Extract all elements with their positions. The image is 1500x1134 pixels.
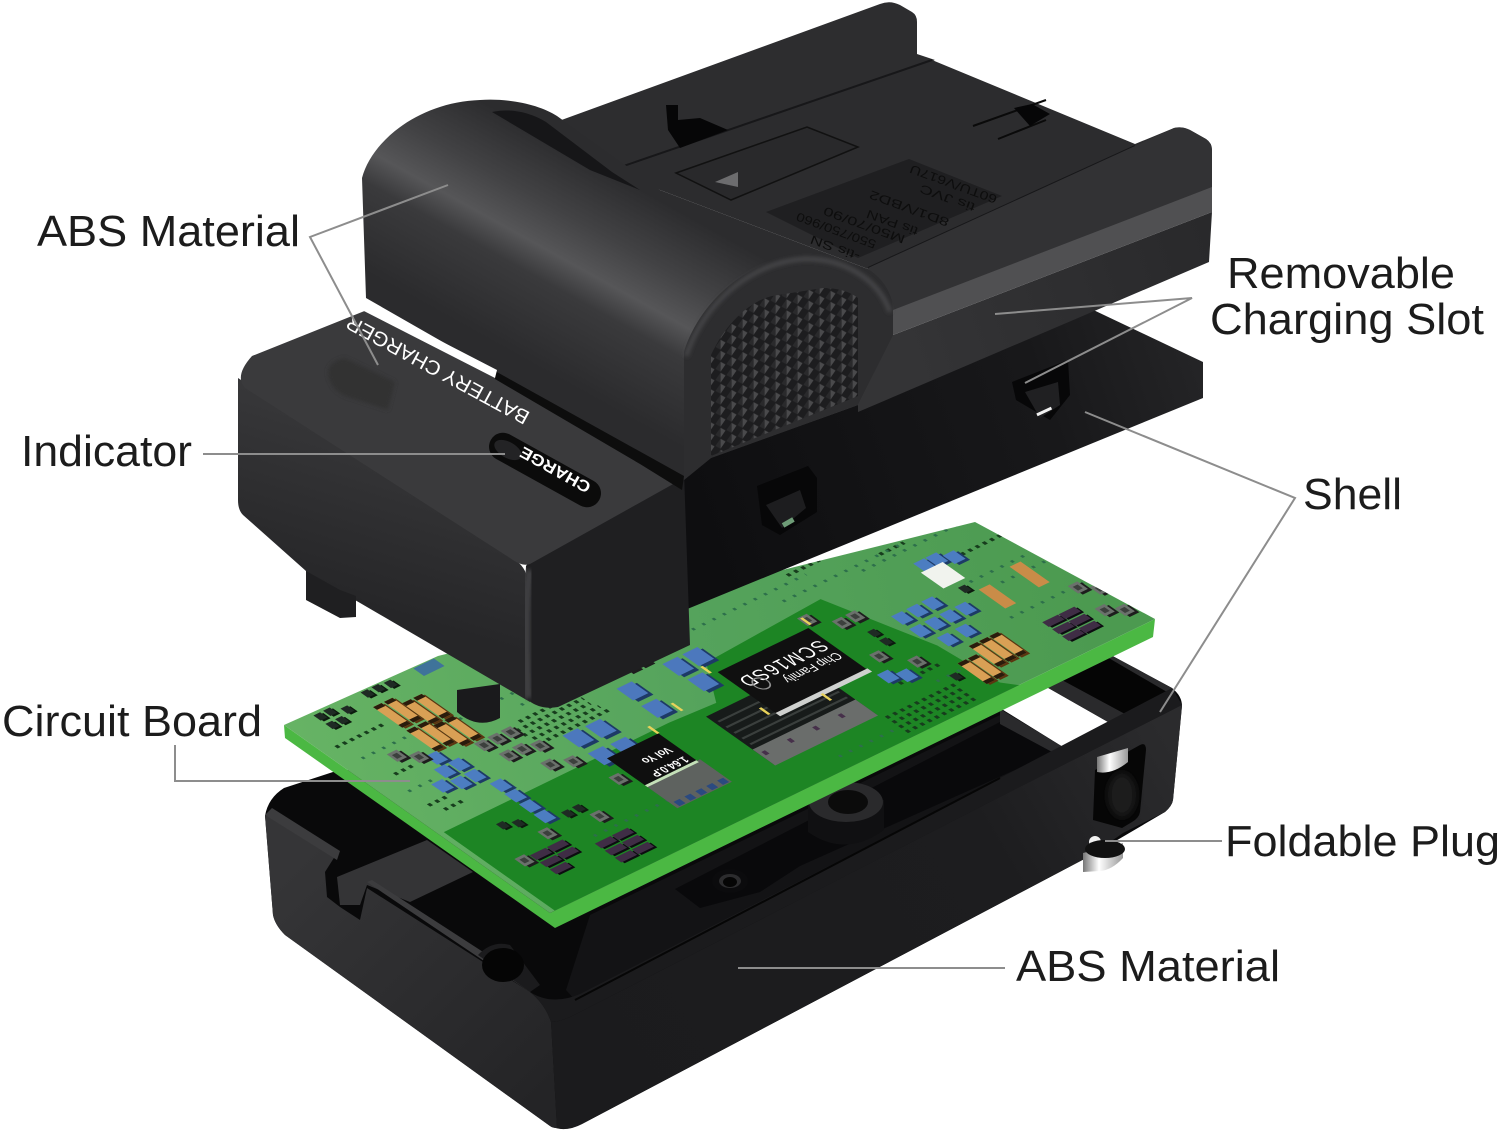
- orange inductors right: [958, 632, 1030, 685]
- shell front face: [526, 472, 690, 708]
- scattered pads: [360, 526, 1084, 837]
- light dot: [491, 436, 525, 464]
- white strip: [360, 306, 497, 378]
- corner screw recess: [478, 944, 540, 992]
- label: ABS Material bottom: ABS Material: [1016, 942, 1280, 991]
- blue chips center: [562, 647, 724, 767]
- board clip wrapper: [314, 526, 1140, 910]
- side of rail: [858, 212, 1212, 412]
- label: Shell: [1085, 412, 1402, 712]
- blue strip: [413, 658, 445, 676]
- dark parts: [486, 584, 1045, 873]
- slot left: [666, 105, 728, 148]
- shell left face: [238, 378, 530, 702]
- top shell: [238, 306, 1203, 723]
- main chip: Chip Family: [779, 650, 846, 685]
- latch: [676, 127, 858, 200]
- inner wall: [566, 715, 1092, 1000]
- latch triangle: [715, 172, 738, 187]
- sticker band: [343, 306, 684, 490]
- grey capacitors: [375, 478, 1142, 893]
- top recess: [328, 358, 395, 410]
- label: Indicator: Indicator: [21, 427, 192, 476]
- compat label: [766, 159, 1002, 263]
- shell top face: [241, 308, 684, 565]
- lip band: [530, 688, 1182, 1022]
- rear frame window: [1062, 657, 1167, 714]
- hump slot recess: [492, 110, 640, 190]
- compat label: tis JVC: [917, 181, 977, 214]
- battery charger print: BATTERY CHARGER: [343, 311, 533, 428]
- main chip: SCM16SD: [732, 637, 834, 691]
- slot right: [973, 100, 1050, 139]
- pill: [484, 428, 606, 512]
- screw post: [808, 782, 884, 845]
- hump end face: [684, 255, 893, 480]
- label: ABS Material top: [37, 185, 448, 365]
- small chip: 1.64.0.P: [647, 754, 691, 778]
- floor: [618, 60, 1212, 312]
- compat label: 550/750/960: [794, 209, 878, 251]
- dark solder zone: [444, 599, 1018, 910]
- clip right: [1012, 360, 1070, 420]
- board local component plane: [314, 526, 1140, 910]
- blue chips cluster left: [428, 751, 491, 794]
- notch inner shade: [1108, 773, 1136, 817]
- label: Removable Charging Slot: Removable: [1227, 249, 1455, 298]
- blue chips right: [876, 550, 982, 684]
- label: Foldable Plug: Foldable Plug: [1225, 817, 1500, 866]
- label: Removable Charging Slot: Charging Slot: [1210, 295, 1484, 344]
- compat label: tis PAN: [864, 207, 920, 238]
- label: Shell: Shell: [1303, 470, 1402, 519]
- interior wall dark: [675, 722, 1055, 908]
- light stripe: [893, 187, 1212, 335]
- black band: [495, 371, 684, 490]
- main chip: [718, 627, 872, 716]
- clip left: [757, 466, 817, 535]
- lower housing silhouette and interior: [265, 653, 1182, 1129]
- small chip: Vol Yo: [637, 745, 675, 765]
- board edge: [284, 619, 1155, 928]
- battery hump: [362, 100, 893, 480]
- lower housing: [265, 653, 1182, 1129]
- compat label: 60TU/V617U: [908, 162, 999, 206]
- small black chips left: [314, 680, 401, 730]
- grey floor plate: [337, 840, 473, 905]
- label: ABS Material top: ABS Material: [37, 207, 300, 256]
- white gap: [1000, 685, 1108, 747]
- lower housing left face: [265, 815, 557, 1128]
- small chip body: [646, 759, 732, 808]
- rear rail: [556, 2, 935, 172]
- compat label: -tis SN: [808, 232, 862, 263]
- mesh grille: [711, 288, 858, 456]
- right face: [551, 705, 1182, 1129]
- dotted pads: [334, 534, 1002, 811]
- left lip strip: [367, 880, 534, 992]
- bar below white gap: [1000, 709, 1063, 753]
- white memory card: [921, 562, 965, 589]
- hump end rim highlight: [686, 259, 890, 356]
- charge indicator button: [484, 428, 606, 512]
- plug pin lower: [1083, 836, 1125, 872]
- plate under cradle: [680, 306, 1203, 612]
- rim groove: [575, 778, 1000, 1000]
- shell tab: [306, 571, 356, 618]
- chip pins: [647, 618, 832, 734]
- shell post: [457, 684, 500, 723]
- small chip: [607, 733, 699, 787]
- purple parts right: [1042, 606, 1104, 642]
- compat label: M50/70/90: [821, 204, 907, 246]
- orange inductors left: [373, 694, 486, 752]
- connector heat sink: [706, 688, 878, 766]
- label: Circuit Board: Circuit Board: [2, 697, 262, 746]
- plug notch: [1093, 744, 1146, 828]
- removable charging slot: [362, 2, 1212, 480]
- compat label: 8D1/VBD2: [867, 187, 951, 229]
- purple parts bottom: [530, 828, 658, 875]
- left rim strip: [265, 808, 340, 860]
- board surface: [284, 522, 1155, 913]
- orange part top right: [978, 562, 1050, 608]
- corner highlight: [526, 570, 530, 698]
- screw hole: [712, 869, 748, 893]
- front lip top: [868, 127, 1212, 312]
- circuit board: [284, 522, 1155, 928]
- rear frame: [1043, 653, 1182, 735]
- rail division line: [612, 60, 1135, 268]
- label: Removable Charging Slot: [995, 249, 1484, 383]
- blue chain: [490, 778, 561, 825]
- label: Circuit Board: [2, 697, 410, 781]
- charge text: CHARGE: [517, 443, 594, 495]
- plug pin upper: [1097, 748, 1128, 773]
